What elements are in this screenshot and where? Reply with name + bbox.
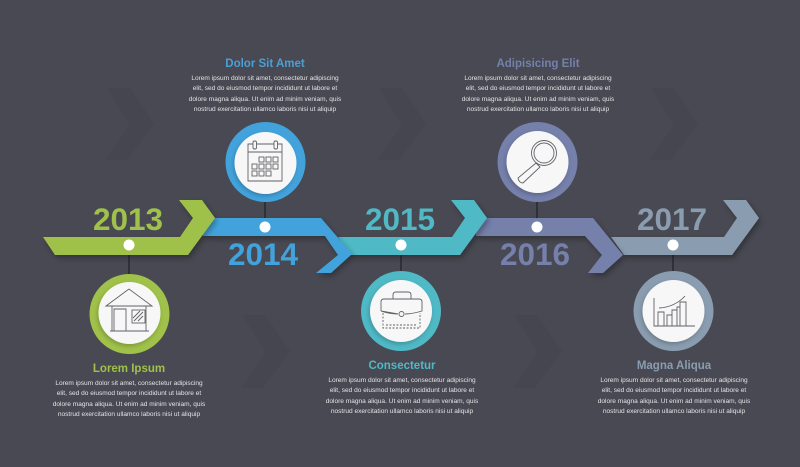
arrow: teal 2015 bbox=[338, 200, 487, 255]
year 2016: 2016 bbox=[500, 236, 570, 272]
icon circle: chart bbox=[634, 271, 714, 351]
text block: Magna Aliqua: nostrud exercitation ullamco laboris nisi ut aliquip bbox=[603, 408, 745, 415]
icon circle: briefcase bbox=[361, 271, 441, 351]
text block: Dolor Sit Amet: Dolor Sit Amet bbox=[225, 58, 305, 70]
icon circle: house bbox=[90, 274, 170, 354]
text block: Magna Aliqua: elit, sed do eiusmod tempor incididunt ut labore et bbox=[602, 387, 746, 394]
text block: Adipisicing Elit: elit, sed do eiusmod tempor incididunt ut labore et bbox=[466, 85, 610, 92]
text block: Dolor Sit Amet: nostrud exercitation ullamco laboris nisi ut aliquip bbox=[194, 106, 336, 113]
year 2014: 2014 bbox=[228, 236, 298, 272]
year 2017: 2017 bbox=[637, 201, 707, 237]
text block: Dolor Sit Amet: Lorem ipsum dolor sit amet, consectetur adipiscing bbox=[191, 75, 339, 82]
text block: Adipisicing Elit bbox=[462, 58, 614, 113]
text block: Consectetur: elit, sed do eiusmod tempor incididunt ut labore et bbox=[330, 387, 474, 394]
text block: Adipisicing Elit: nostrud exercitation ullamco laboris nisi ut aliquip bbox=[467, 106, 609, 113]
connector lines bbox=[129, 200, 673, 276]
arrow: blue 2014 bbox=[203, 218, 352, 273]
text block: Adipisicing Elit: dolore magna aliqua. Ut enim ad minim veniam, quis bbox=[462, 96, 614, 103]
icon circle: calendar bbox=[226, 122, 306, 202]
year 2013: 2013 bbox=[93, 201, 163, 237]
text block: Dolor Sit Amet bbox=[189, 58, 341, 113]
text block: Magna Aliqua: Magna Aliqua bbox=[637, 360, 711, 372]
text block: Consectetur: dolore magna aliqua. Ut enim ad minim veniam, quis bbox=[326, 398, 478, 405]
text block: Dolor Sit Amet: dolore magna aliqua. Ut enim ad minim veniam, quis bbox=[189, 96, 341, 103]
icon circle: magnifier bbox=[498, 122, 578, 202]
text block: Lorem Ipsum: elit, sed do eiusmod tempor incididunt ut labore et bbox=[57, 390, 201, 397]
arrow: purple 2016 bbox=[476, 218, 623, 273]
text block: Lorem Ipsum bbox=[53, 363, 205, 418]
text block: Consectetur: Consectetur bbox=[368, 360, 436, 372]
text block: Lorem Ipsum: Lorem Ipsum bbox=[93, 363, 165, 375]
arrow: grey 2017 bbox=[611, 200, 759, 255]
text block: Adipisicing Elit: Lorem ipsum dolor sit amet, consectetur adipiscing bbox=[464, 75, 612, 82]
text block: Lorem Ipsum: nostrud exercitation ullamco laboris nisi ut aliquip bbox=[58, 411, 200, 418]
text block: Consectetur bbox=[326, 360, 478, 415]
text block: Magna Aliqua: dolore magna aliqua. Ut enim ad minim veniam, quis bbox=[598, 398, 750, 405]
text block: Consectetur: nostrud exercitation ullamco laboris nisi ut aliquip bbox=[331, 408, 473, 415]
timeline dots bbox=[124, 222, 678, 250]
text block: Consectetur: Lorem ipsum dolor sit amet, consectetur adipiscing bbox=[328, 377, 476, 384]
text block: Magna Aliqua bbox=[598, 360, 750, 415]
text block: Adipisicing Elit: Adipisicing Elit bbox=[496, 58, 580, 70]
text block: Magna Aliqua: Lorem ipsum dolor sit amet, consectetur adipiscing bbox=[600, 377, 748, 384]
text block: Lorem Ipsum: dolore magna aliqua. Ut enim ad minim veniam, quis bbox=[53, 401, 205, 408]
text block: Dolor Sit Amet: elit, sed do eiusmod tempor incididunt ut labore et bbox=[193, 85, 337, 92]
text block: Lorem Ipsum: Lorem ipsum dolor sit amet, consectetur adipiscing bbox=[55, 380, 203, 387]
year 2015: 2015 bbox=[365, 201, 435, 237]
background chevrons bbox=[105, 88, 698, 388]
arrow: green 2013 bbox=[43, 200, 215, 255]
